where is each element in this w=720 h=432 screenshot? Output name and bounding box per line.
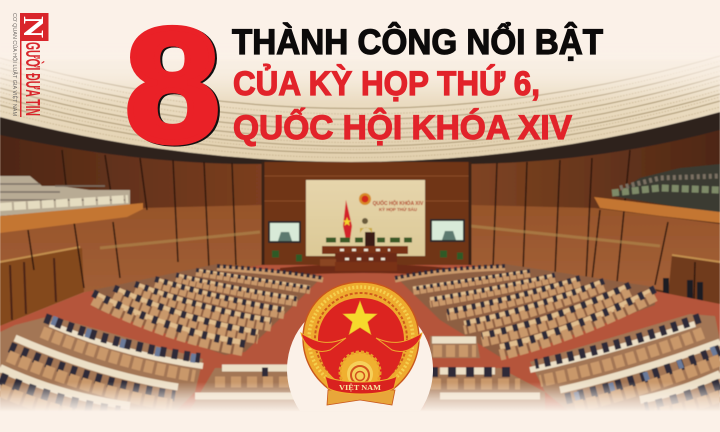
- cogwheel: [340, 352, 380, 392]
- right wall: [470, 130, 720, 308]
- left red leaf: [301, 333, 346, 351]
- title line 1: THÀNH CÔNG NỔI BẬT: [232, 22, 603, 62]
- left wall: [0, 135, 263, 326]
- right red leaf: [376, 333, 422, 351]
- left screen: [268, 221, 301, 243]
- red ribbon: [325, 376, 397, 394]
- numeral 8: 8: [125, 0, 220, 176]
- wheat wreath: [303, 282, 419, 391]
- backdrop emblem and caption: KỲ HỌP THỨ SÁU: [379, 207, 417, 212]
- logo red square: [20, 13, 48, 41]
- gold banner base: [327, 390, 395, 405]
- seating: centre-left block: [93, 264, 323, 355]
- logo rule: [20, 41, 22, 117]
- rostrum tiers: [272, 218, 463, 276]
- bottom fade: [0, 382, 720, 412]
- centre backdrop panel: [306, 180, 425, 256]
- right screen: [430, 219, 465, 242]
- logo letter N: N: [17, 16, 49, 38]
- backdrop emblem and caption: QUỐC HỘI KHÓA XIV: [373, 199, 424, 207]
- right balcony: [594, 164, 720, 223]
- seating: centre-right block: [395, 264, 655, 357]
- numeral 8: 8: [127, 0, 222, 177]
- seating: middle rows by emblem: [190, 336, 545, 410]
- left balcony: [0, 176, 143, 233]
- logo: Người Đưa Tin: [11, 13, 49, 117]
- logo tagline: CƠ QUAN CỦA HỘI LUẬT GIA VIỆT NAM: [11, 13, 19, 116]
- red field: [318, 298, 404, 380]
- gold star: [343, 301, 377, 334]
- national emblem: [301, 282, 422, 405]
- ceiling top fade: [0, 40, 720, 102]
- hall floor: [0, 265, 720, 432]
- logo wordmark: GƯỜI ĐƯA TIN: [21, 42, 45, 116]
- seating: front-right rows: [530, 314, 720, 414]
- title line 3: QUỐC HỘI KHÓA XIV: [233, 108, 572, 147]
- backdrop emblem and caption: [359, 193, 424, 212]
- hall ceiling: [0, 56, 720, 162]
- emblem text: VIỆT NAM: [339, 383, 381, 392]
- national flag: [343, 200, 352, 240]
- seating: front-left rows: [0, 316, 203, 420]
- title line 2: CỦA KỲ HỌP THỨ 6,: [233, 65, 540, 103]
- ceiling rim: [0, 112, 720, 174]
- back wall: [262, 162, 471, 272]
- emblem disc: [287, 296, 433, 411]
